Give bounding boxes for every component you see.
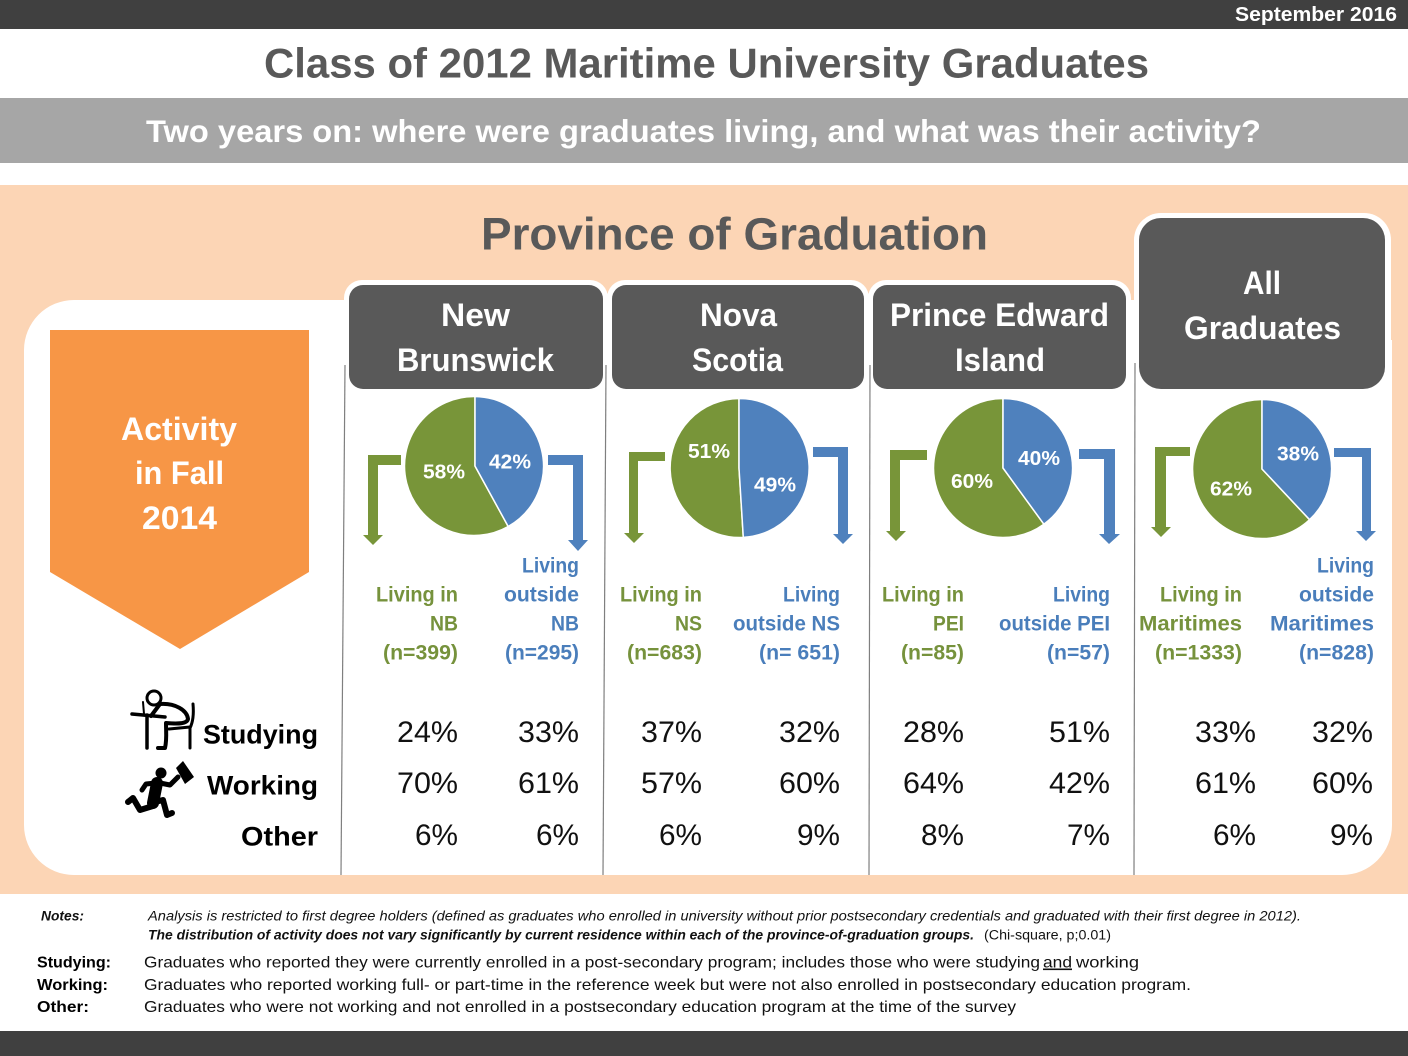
column labels: living in PEI: Living in <box>882 582 964 606</box>
column labels: living in PEI <box>882 582 964 664</box>
data: all graduates living in Maritimes <box>1195 716 1256 852</box>
icon: running worker <box>128 761 194 815</box>
top bar with date <box>0 0 1408 29</box>
column labels: living outside Maritimes: (n=828) <box>1299 640 1374 664</box>
column labels: living in NS: (n=683) <box>627 640 702 664</box>
pie chart: All Graduates <box>1193 399 1332 538</box>
column labels: living outside Maritimes: Living <box>1317 554 1374 578</box>
column labels: living outside PEI: outside PEI <box>999 612 1110 636</box>
row label: studying: Studying <box>203 720 318 750</box>
activity pentagon <box>50 330 309 649</box>
data: New Brunswick living in NB <box>397 716 458 852</box>
data: Nova Scotia living in NS: 6% <box>659 819 702 852</box>
column labels: living outside NB: (n=295) <box>505 640 579 664</box>
bottom bar <box>0 1031 1408 1056</box>
column labels: living in PEI: PEI <box>933 612 964 636</box>
pie chart: Nova Scotia <box>670 398 809 537</box>
activity pentagon: 2014 <box>142 500 217 536</box>
definitions block: Graduates who reported working full- or part-time in the reference week but were not also enrolled in postsecondary education program. <box>144 977 1191 994</box>
arrow: all graduates green <box>1151 447 1190 537</box>
column labels: living outside NS: (n= 651) <box>759 640 840 664</box>
data: PEI living outside PEI: 51% <box>1049 716 1110 749</box>
arrow: PEI blue <box>1079 449 1120 544</box>
column labels: living in NS: Living in <box>620 582 702 606</box>
data: all graduates living outside Maritimes: 32% <box>1312 716 1373 749</box>
data: PEI living in PEI: 64% <box>903 767 964 800</box>
data: New Brunswick living outside NB: 6% <box>536 819 579 852</box>
column labels: living in NS <box>620 582 702 664</box>
header: New Brunswick: New <box>441 297 510 333</box>
definitions block: and <box>1043 954 1072 972</box>
data: Nova Scotia living outside NS: 32% <box>779 716 840 749</box>
header: Prince Edward Island: Island <box>955 342 1045 378</box>
pie chart: Prince Edward Island <box>934 398 1073 538</box>
column labels: living outside PEI: (n=57) <box>1047 640 1110 664</box>
data: all graduates living in Maritimes: 33% <box>1195 716 1256 749</box>
pie chart: Prince Edward Island: 60% <box>951 471 993 493</box>
column labels: living outside Maritimes: Maritimes <box>1270 612 1374 636</box>
data: all graduates living outside Maritimes <box>1312 716 1373 852</box>
column labels: living outside NB: outside <box>504 582 579 606</box>
arrow: all graduates blue <box>1334 448 1376 541</box>
title: Class of 2012 Maritime University Graduates <box>264 40 1149 86</box>
column labels: living outside NB: NB <box>551 612 579 636</box>
data: PEI living in PEI: 8% <box>921 819 964 852</box>
definitions block: Studying: <box>37 954 111 972</box>
header: Nova Scotia: Scotia <box>692 342 783 378</box>
column labels: living outside NS: outside NS <box>733 612 840 636</box>
pie chart: Prince Edward Island: 40% <box>1018 448 1060 470</box>
header: Nova Scotia <box>607 280 869 394</box>
data: New Brunswick living in NB: 6% <box>415 819 458 852</box>
column labels: living outside PEI <box>999 582 1110 664</box>
white content panel <box>24 300 1392 875</box>
column labels: living in Maritimes: (n=1333) <box>1155 640 1242 664</box>
data: Nova Scotia living outside NS <box>779 716 840 852</box>
header: All Graduates: All <box>1243 265 1281 301</box>
pie chart: New Brunswick: 42% <box>489 452 531 474</box>
activity pentagon: in Fall <box>135 455 224 491</box>
header: Nova Scotia: Nova <box>700 297 777 333</box>
header: Prince Edward Island <box>868 280 1131 394</box>
pie chart: Nova Scotia: 51% <box>688 441 730 463</box>
definitions block: Graduates who reported they were currently enrolled in a post-secondary program; includes those who were studying <box>144 954 1040 972</box>
pie chart: All Graduates: 38% <box>1277 444 1319 466</box>
column labels: living in Maritimes <box>1139 582 1242 664</box>
top bar with date: September 2016 <box>1235 4 1397 26</box>
data: New Brunswick living outside NB: 33% <box>518 716 579 749</box>
column labels: living in NB: Living in <box>376 582 458 606</box>
arrow: PEI green <box>886 450 927 541</box>
pie chart: New Brunswick: 58% <box>423 462 465 484</box>
data: PEI living outside PEI: 7% <box>1067 819 1110 852</box>
notes block: Analysis is restricted to first degree holders (defined as graduates who enrolled in university without prior postsecondary credentials and graduated with their first degree in 2012). <box>147 908 1301 924</box>
row label: working: Working <box>207 770 318 800</box>
column labels: living outside Maritimes <box>1270 554 1374 664</box>
subtitle band <box>0 98 1408 163</box>
data: PEI living in PEI <box>903 716 964 852</box>
column labels: living outside NS <box>733 582 840 664</box>
data: all graduates living in Maritimes: 61% <box>1195 767 1256 800</box>
data: all graduates living outside Maritimes: 9% <box>1330 819 1373 852</box>
pie chart: New Brunswick <box>405 396 544 535</box>
definitions block: Working: <box>37 977 108 994</box>
data: New Brunswick living outside NB: 61% <box>518 767 579 800</box>
definitions block: Graduates who were not working and not enrolled in a postsecondary education program at the time of the survey <box>144 999 1016 1016</box>
column labels: living in Maritimes: Living in <box>1160 582 1242 606</box>
arrow: NB blue <box>548 455 588 551</box>
pie chart: Nova Scotia: 49% <box>754 474 796 496</box>
column labels: living in Maritimes: Maritimes <box>1139 612 1242 636</box>
header: All Graduates: Graduates <box>1184 310 1341 346</box>
data: PEI living in PEI: 28% <box>903 716 964 749</box>
data: Nova Scotia living outside NS: 60% <box>779 767 840 800</box>
column labels: living outside NB: Living <box>522 554 579 578</box>
arrow: NS green <box>624 452 665 543</box>
data: New Brunswick living in NB: 70% <box>397 767 458 800</box>
header: New Brunswick <box>344 280 608 394</box>
data: PEI living outside PEI <box>1049 716 1110 852</box>
notes block <box>41 908 1301 942</box>
column labels: living in NB: NB <box>430 612 458 636</box>
peach background panel <box>0 185 1408 894</box>
activity pentagon: Activity <box>121 411 237 447</box>
definitions block <box>37 954 1191 1016</box>
data: all graduates living in Maritimes: 6% <box>1213 819 1256 852</box>
column labels: living in NB <box>376 582 458 664</box>
icon: student at desk <box>132 691 193 748</box>
arrow: NS blue <box>813 447 853 544</box>
column labels: living outside NS: Living <box>783 582 840 606</box>
column labels: living in NS: NS <box>675 612 702 636</box>
column labels: living outside PEI: Living <box>1053 582 1110 606</box>
definitions block: Other: <box>37 999 89 1016</box>
subtitle band: Two years on: where were graduates living, and what was their activity? <box>146 113 1261 149</box>
notes block: Notes: <box>41 908 84 924</box>
definitions block: working <box>1075 954 1139 972</box>
notes block: The distribution of activity does not vary significantly by current residence within each of the province-of-graduation groups. <box>148 928 974 942</box>
heading: province of graduation: Province of Graduation <box>481 208 988 260</box>
column labels: living outside NB <box>504 554 579 664</box>
data: New Brunswick living outside NB <box>518 716 579 852</box>
arrow: NB green <box>363 455 401 545</box>
data: Nova Scotia living in NS: 37% <box>641 716 702 749</box>
data: PEI living outside PEI: 42% <box>1049 767 1110 800</box>
data: New Brunswick living in NB: 24% <box>397 716 458 749</box>
header: Prince Edward Island: Prince Edward <box>890 297 1109 333</box>
column labels: living in PEI: (n=85) <box>901 640 964 664</box>
column labels: living outside Maritimes: outside <box>1299 582 1374 606</box>
data: Nova Scotia living in NS <box>641 716 702 852</box>
data: Nova Scotia living in NS: 57% <box>641 767 702 800</box>
data: all graduates living outside Maritimes: 60% <box>1312 767 1373 800</box>
pie chart: All Graduates: 62% <box>1210 478 1252 500</box>
header: New Brunswick: Brunswick <box>397 342 554 378</box>
header: All Graduates <box>1134 213 1391 394</box>
data: Nova Scotia living outside NS: 9% <box>797 819 840 852</box>
column divider lines <box>341 363 1135 875</box>
column labels: living in NB: (n=399) <box>383 640 458 664</box>
notes block: (Chi-square, p;0.01) <box>984 928 1111 942</box>
row label: other: Other <box>241 822 318 852</box>
